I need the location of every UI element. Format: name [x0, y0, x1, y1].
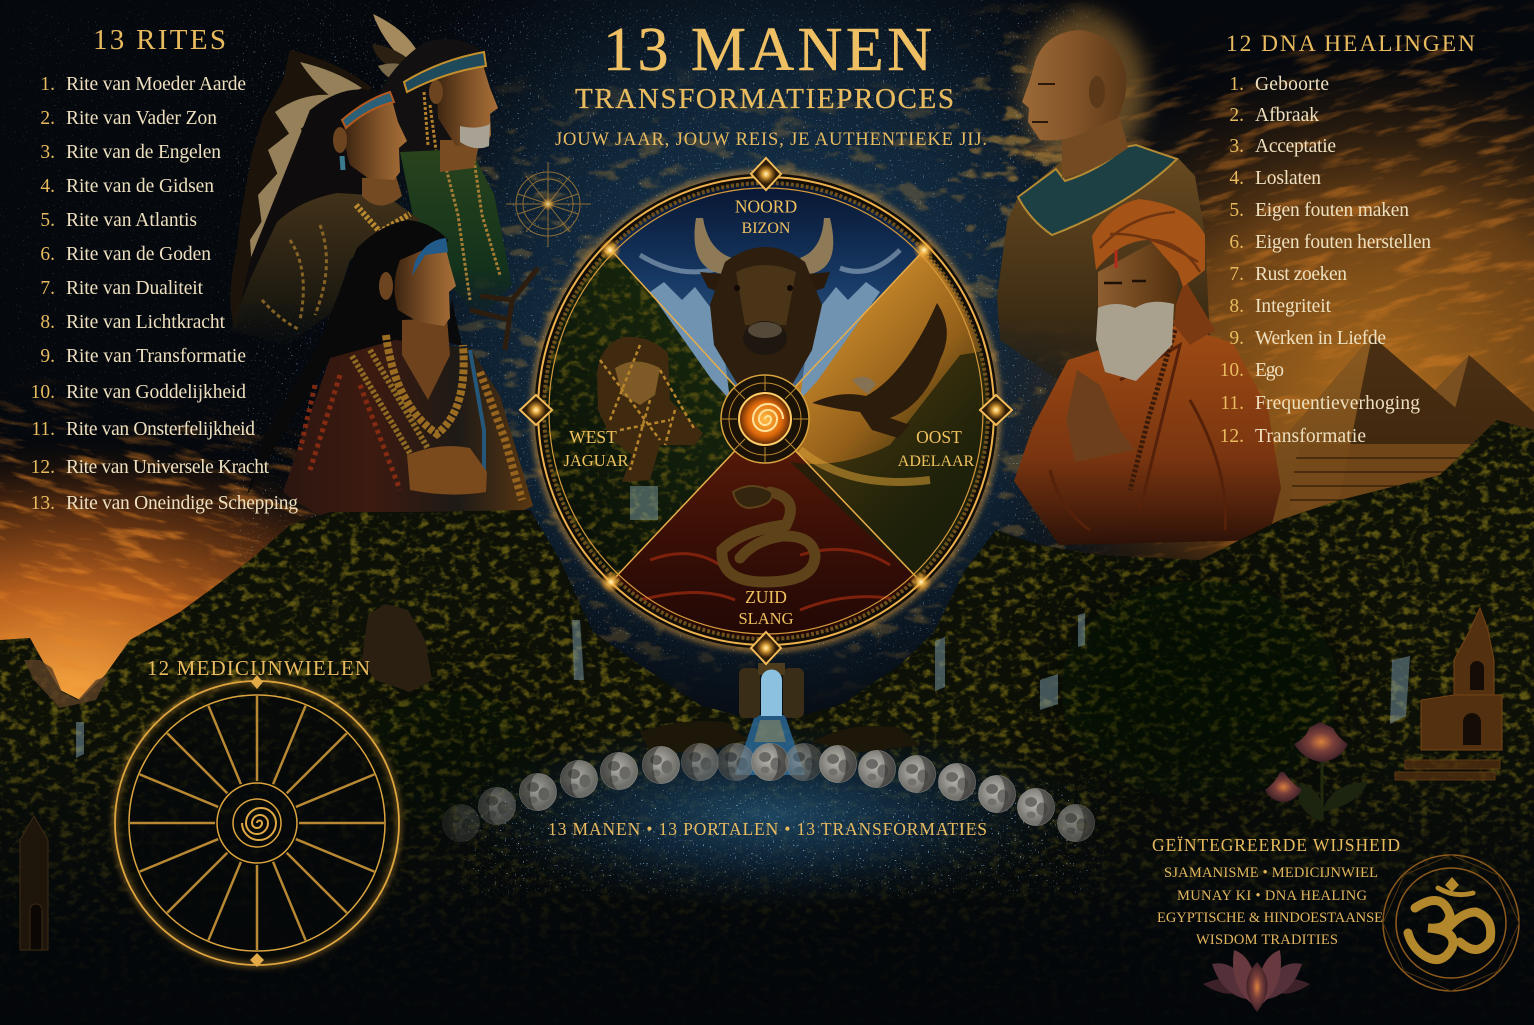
rites list: Rite van Dualiteit [66, 278, 204, 299]
figure: left native woman with feathers [230, 50, 420, 345]
healing list: 1. [1229, 74, 1244, 95]
figure: rear native elder [372, 14, 512, 320]
healing list: Ego [1255, 360, 1284, 381]
healing list: Eigen fouten herstellen [1255, 232, 1431, 253]
healing list: Afbraak [1255, 105, 1319, 126]
wheel spiral [242, 808, 276, 840]
rites list: Rite van Vader Zon [66, 108, 217, 129]
tree silhouette near wheel [470, 268, 538, 350]
healing list: 3. [1229, 136, 1244, 157]
rites list: Rite van Onsterfelijkheid [66, 419, 255, 440]
wisdom lines: SJAMANISME • MEDICIJNWIEL [1164, 865, 1378, 881]
label: west jaguar [563, 427, 629, 470]
rites list: 11. [31, 419, 55, 440]
om symbol [1408, 888, 1491, 960]
healing list: 7. [1229, 264, 1244, 285]
feathers [372, 14, 421, 84]
heading: 13 rites: 13 RITES [93, 24, 226, 56]
healing list: 9. [1229, 328, 1244, 349]
animal: serpent [722, 486, 815, 582]
rites list: 10. [31, 382, 55, 403]
rites list: 6. [40, 244, 55, 265]
wheel rim [538, 177, 994, 645]
healing list: 6. [1229, 232, 1244, 253]
east landscape [790, 350, 992, 582]
sectors [544, 183, 988, 639]
west waterfall [630, 486, 658, 520]
healing list: Integriteit [1255, 296, 1332, 317]
figure: front native elder [247, 220, 533, 531]
north mountains [650, 282, 730, 400]
river and starry water [450, 715, 1090, 910]
rites list: Rite van de Engelen [66, 142, 221, 163]
panel: 12 medicijnwielen [115, 656, 399, 967]
valley mountains at sunset [24, 660, 108, 708]
label: zuid slang: ZUID [745, 587, 787, 607]
healing list: 11. [1220, 393, 1244, 414]
feather fan [230, 50, 372, 330]
waterfalls [76, 613, 1410, 758]
label: noord bizon [735, 196, 797, 237]
rites list: 12. [31, 457, 55, 478]
jungle hills [0, 420, 1534, 940]
animal: bison [694, 218, 833, 398]
healing list: Eigen fouten maken [1255, 200, 1409, 221]
rock cliff left [362, 604, 432, 692]
figure: hindu sage with turban [1014, 199, 1281, 545]
rites list: 7. [40, 278, 55, 299]
rocks by the river [640, 721, 920, 752]
rites list: Rite van de Gidsen [66, 176, 214, 197]
healing list: Frequentieverhoging [1255, 393, 1420, 414]
sub heading: TRANSFORMATIEPROCES [575, 83, 954, 115]
portal gate [739, 663, 804, 718]
rites list: 4. [40, 176, 55, 197]
rites list: Rite van Transformatie [66, 346, 246, 367]
healing list: 10. [1220, 360, 1244, 381]
wisdom lines: MUNAY KI • DNA HEALING [1177, 888, 1368, 904]
rites list [31, 74, 298, 514]
compass star ornament [506, 162, 591, 247]
panel: 13 rites [31, 24, 298, 514]
healing list: 4. [1229, 168, 1244, 189]
healing list: Werken in Liefde [1255, 328, 1386, 349]
healing list: 2. [1229, 105, 1244, 126]
panel: 12 dna healingen [1220, 31, 1475, 447]
animal: eagle [812, 303, 947, 438]
rites list: Rite van Oneindige Schepping [66, 493, 298, 514]
label: oost adelaar [898, 427, 975, 470]
wisdom lines: EGYPTISCHE & HINDOESTAANSE [1157, 910, 1383, 926]
rites list: Rite van Moeder Aarde [66, 74, 246, 95]
rites list: Rite van Goddelijkheid [66, 382, 246, 403]
left temple ruin [20, 816, 48, 950]
label: west jaguar: WEST [569, 427, 617, 447]
healing list: 12. [1220, 426, 1244, 447]
corner sparks [599, 239, 935, 593]
label: noord bizon: NOORD [735, 196, 797, 216]
rites list: Rite van Lichtkracht [66, 312, 226, 333]
heading: 12 dna healingen: 12 DNA HEALINGEN [1226, 31, 1475, 57]
golden wheel diagram [115, 675, 399, 967]
wheel glow [534, 173, 998, 649]
center spiral hub [721, 375, 809, 463]
icon: om mandala [1383, 855, 1519, 991]
rites list: Rite van Universele Kracht [66, 457, 270, 478]
healing list: 8. [1229, 296, 1244, 317]
rites list: 13. [31, 493, 55, 514]
rites list: 8. [40, 312, 55, 333]
healing list: Geboorte [1255, 74, 1329, 95]
panel: geintegreerde wijsheid [1152, 835, 1400, 948]
rites list: 9. [40, 346, 55, 367]
rites list: 2. [40, 108, 55, 129]
healing list: Rust zoeken [1255, 264, 1347, 285]
icon: large lotus [1203, 950, 1310, 1012]
heading: GEÏNTEGREERDE WIJSHEID [1152, 835, 1400, 855]
rites list: Rite van de Goden [66, 244, 211, 265]
south lava pattern [640, 549, 900, 610]
label: zuid slang [738, 587, 794, 628]
rites list: 1. [40, 74, 55, 95]
direction diamonds [520, 158, 1012, 664]
cross lines [611, 250, 924, 582]
healing list: Acceptatie [1255, 136, 1336, 157]
wisdom lines [1157, 865, 1383, 948]
moon phases arc [442, 744, 1094, 842]
icon: upper lotus plant [1265, 722, 1368, 822]
moons caption: 13 MANEN • 13 PORTALEN • 13 TRANSFORMATIES [548, 819, 987, 839]
wisdom lines: WISDOM TRADITIES [1196, 932, 1338, 948]
tagline: JOUW JAAR, JOUW REIS, JE AUTHENTIEKE JIJ. [555, 130, 987, 150]
healing list: Transformatie [1255, 426, 1366, 447]
spokes [130, 696, 384, 950]
main heading: 13 MANEN [603, 16, 932, 84]
rites list: Rite van Atlantis [66, 210, 197, 231]
label: zuid slang: SLANG [738, 609, 794, 628]
rites list: 5. [40, 210, 55, 231]
label: oost adelaar: OOST [916, 427, 962, 447]
healing list [1220, 74, 1431, 447]
right temple ruin [1395, 608, 1502, 780]
figure: bald egyptian man [997, 12, 1210, 430]
label: west jaguar: JAGUAR [563, 451, 629, 470]
label: noord bizon: BIZON [742, 220, 791, 237]
rites list: 3. [40, 142, 55, 163]
pyramids [1262, 336, 1534, 520]
heading: 12 medicijnwielen: 12 MEDICIJNWIELEN [147, 656, 370, 680]
animal: jaguar [597, 337, 703, 482]
label: oost adelaar: ADELAAR [898, 453, 975, 470]
medicine wheel: four directions [520, 158, 1012, 664]
title [555, 16, 987, 150]
healing list: Loslaten [1255, 168, 1321, 189]
healing list: 5. [1229, 200, 1244, 221]
